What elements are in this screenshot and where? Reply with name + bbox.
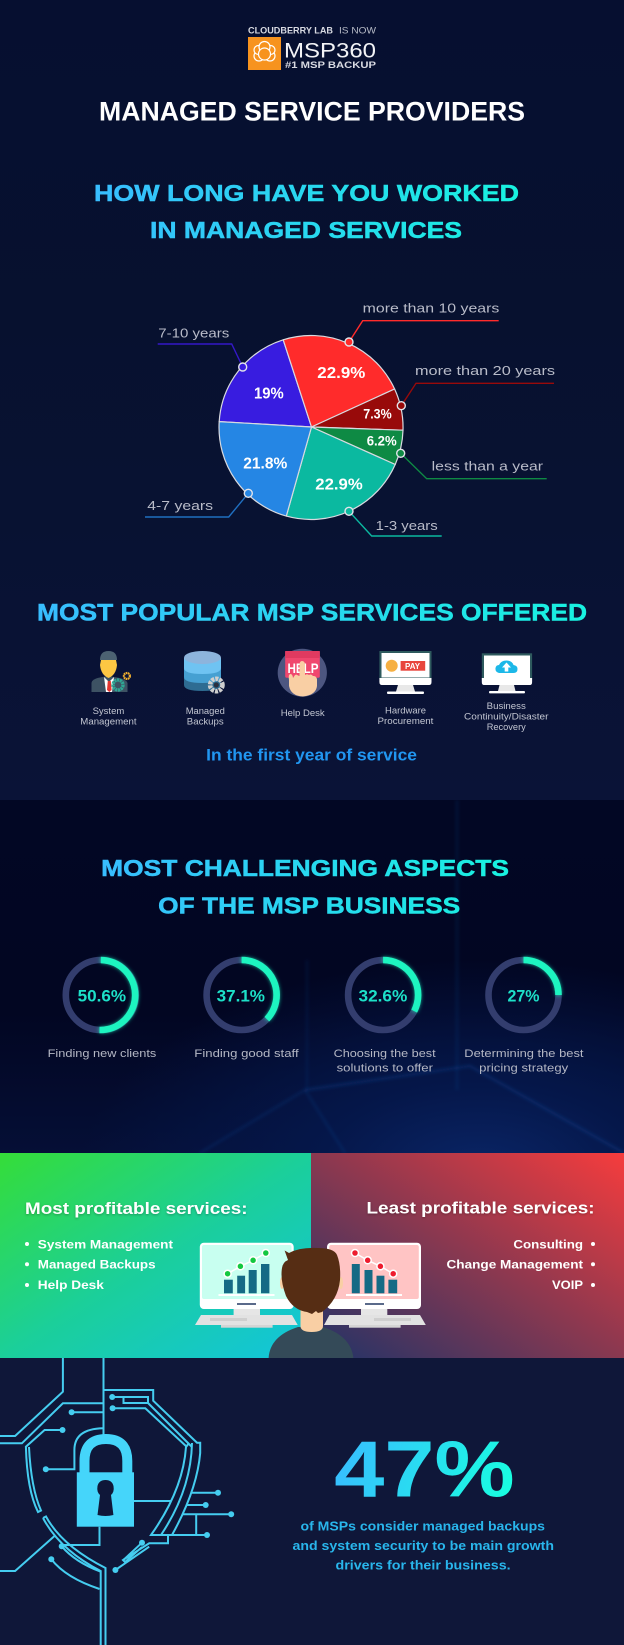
pie labels [147,301,555,533]
text block: growth drivers: drivers for their business. [336,1557,511,1572]
heading: most challenging aspects: OF THE MSP BUSINESS [158,892,460,918]
logo: MSP360: #1 MSP BACKUP [285,60,376,70]
heading: most popular services: MOST POPULAR MSP SERVICES OFFERED [37,600,587,627]
illustration: person seen from behind [269,1248,353,1358]
panel: profitability comparison content [25,1198,595,1358]
pie values: 22.9% [317,365,365,382]
ring labels: Finding good staff [194,1048,300,1060]
ring labels: Determining the best [464,1048,584,1060]
logo: MSP360: CLOUDBERRY LAB [248,25,333,35]
caption: in the first year: In the first year of service [206,747,417,765]
service labels [80,701,549,733]
logo: MSP360 [248,25,376,70]
list: least profitable: Consulting [513,1237,583,1251]
pie values [243,365,397,494]
list: least profitable: Change Management [446,1258,583,1272]
pie values: 7.3% [363,407,392,422]
service labels: Managed [186,706,225,717]
icon: system management [92,651,130,692]
icon: padlock [77,1439,134,1527]
list: most profitable: System Management [38,1237,173,1251]
ring labels: solutions to offer [337,1063,433,1075]
logo: MSP360: IS NOW [339,25,376,35]
list: least profitable [446,1237,595,1292]
service labels: Backups [187,717,224,728]
icon: hardware procurement monitor [379,651,432,694]
wedge: 4-7 years [219,422,312,516]
service labels: Procurement [378,716,434,727]
ring labels: Choosing the best [334,1048,436,1060]
icon: help desk: HELP [288,660,318,676]
pie labels: 7-10 years [158,326,230,341]
service labels: Recovery [487,722,526,733]
heading: most challenging aspects [101,855,509,918]
heading: how long have you worked: IN MANAGED SERVICES [150,217,462,243]
heading: most profitable services: Most profitable services: [25,1199,248,1218]
stat: 47 percent: 47% [334,1425,515,1514]
pie labels: 1-3 years [376,518,438,533]
list: least profitable: VOIP [552,1278,583,1292]
panel: most challenging aspects [0,800,624,1154]
pie labels: 4-7 years [147,498,213,513]
icon: hardware procurement monitor: PAY [405,662,421,671]
ring chart: finding new clients [66,960,136,1030]
ring chart: finding good staff [207,960,277,1030]
ring labels: pricing strategy [479,1063,569,1075]
icon: business continuity monitor [482,653,532,693]
ring chart: determining the best pricing: 27% [508,988,540,1006]
pie values: 19% [254,385,284,402]
panel: most profitable background [0,1153,311,1358]
list: most profitable [25,1237,173,1292]
ring chart: choosing the best solutions [348,960,418,1030]
ring chart: finding new clients: 50.6% [78,988,126,1006]
panel: least profitable background [311,1153,624,1358]
heading: how long have you worked [94,180,519,243]
illustration: falling chart monitor [324,1243,426,1328]
leader lines and dots [145,321,554,536]
pie values: 6.2% [367,434,397,449]
wedge: less than a year [312,427,403,464]
text block: growth drivers [292,1519,554,1572]
service labels: System [93,706,124,717]
wedge: 1-3 years [286,427,395,519]
pie chart: years in managed services [145,301,555,536]
wedge: more than 20 years [312,389,403,430]
pie labels: more than 20 years [415,363,555,378]
panel: 47 percent security [0,1358,624,1645]
service labels: Continuity/Disaster [464,711,549,722]
text block: growth drivers: of MSPs consider managed backups [300,1519,545,1534]
list: most profitable: Managed Backups [38,1258,156,1272]
heading: most challenging aspects: MOST CHALLENGING ASPECTS [101,855,509,881]
ring chart: determining the best pricing [488,960,558,1030]
pie values: 21.8% [243,456,287,473]
icon: managed backups database [184,651,222,691]
pie labels: less than a year [432,459,544,474]
panel: header and tenure survey [0,0,624,800]
service labels: Help Desk [281,708,325,719]
illustration: rising chart monitor [195,1243,298,1328]
title: MANAGED SERVICE PROVIDERS [99,97,525,127]
heading: least profitable services: Least profitable services: [366,1198,595,1217]
service labels: Hardware [385,705,426,716]
ring labels: Finding new clients [48,1048,157,1060]
wedge: 7-10 years [219,340,312,427]
ring chart: choosing the best solutions: 32.6% [358,988,408,1006]
logo: MSP360: MSP360 [284,38,376,62]
pie labels: more than 10 years [363,301,500,316]
icon: help desk [278,649,327,697]
pie values: 22.9% [315,477,363,494]
ring chart: finding good staff: 37.1% [217,988,265,1006]
service labels: Business [487,701,526,712]
list: most profitable: Help Desk [38,1278,104,1292]
icon: circuit shield [0,1358,234,1645]
ring labels [48,1048,584,1075]
wedge: more than 10 years [283,335,395,427]
heading: how long have you worked: HOW LONG HAVE YOU WORKED [94,180,519,206]
text block: growth drivers: and system security to be main growth [292,1538,554,1553]
service labels: Management [80,717,137,728]
